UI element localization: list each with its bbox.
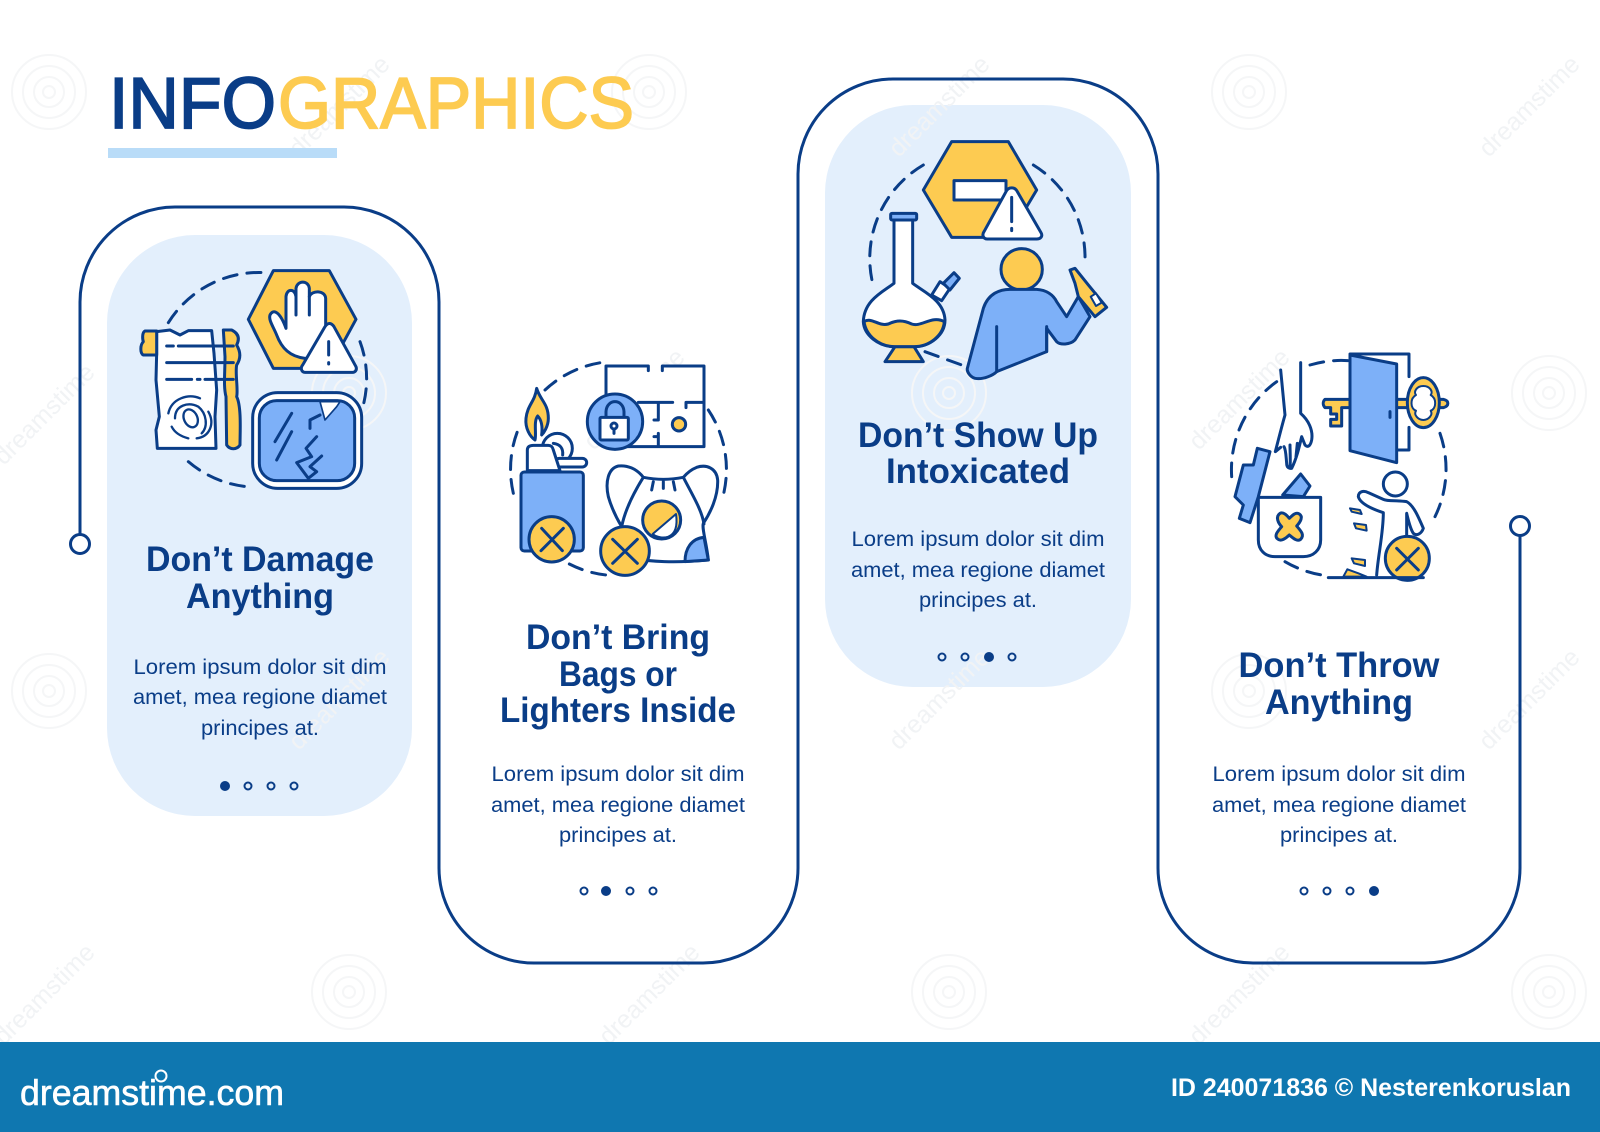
text: card 3	[851, 415, 1105, 612]
text: card 4: Don’t Throw	[1238, 645, 1440, 685]
title	[109, 64, 634, 144]
start node	[70, 534, 90, 554]
text: card 1: amet, mea regione diamet	[133, 685, 387, 709]
pagination dots: card 2	[580, 887, 656, 895]
footer band	[0, 1042, 1600, 1132]
text: card 4: Anything	[1265, 682, 1413, 722]
title underline	[108, 148, 337, 158]
title: GRAPHICS	[278, 64, 634, 144]
diagonal watermark text: dreamstime	[883, 643, 995, 755]
icon: damage (scroll, stop hand, broken mirror)	[141, 271, 367, 488]
text: card 4	[1212, 645, 1466, 847]
footer logo: dreamstime.com	[20, 1072, 284, 1113]
text: card 2: amet, mea regione diamet	[491, 793, 745, 817]
text: card 2: Lorem ipsum dolor sit dim	[492, 762, 744, 786]
diagonal watermark text: dreamstime	[283, 50, 395, 162]
icon: hookah, person with bottle, stop sign	[863, 142, 1107, 379]
text: card 3: amet, mea regione diamet	[851, 558, 1105, 582]
pagination dots: card 1	[221, 782, 298, 790]
text: card 4: Lorem ipsum dolor sit dim	[1212, 762, 1466, 786]
text: card 4: principes at.	[1280, 823, 1398, 847]
diagonal watermark text: dreamstime	[1183, 938, 1295, 1050]
text: card 1: Lorem ipsum dolor sit dim	[134, 655, 386, 679]
text: card 3: Don’t Show Up	[858, 415, 1098, 455]
connecting outline across all four cards	[80, 79, 1520, 963]
diagonal watermark text: dreamstime	[1183, 343, 1295, 455]
text: card 2: Lighters Inside	[500, 690, 736, 730]
text: card 1: Anything	[186, 576, 334, 616]
text: card 3: Intoxicated	[886, 451, 1070, 491]
pagination dots: card 4	[1300, 887, 1378, 895]
diagonal watermark text: dreamstime	[1473, 643, 1585, 755]
footer credit: ID 240071836 © Nesterenkoruslan	[1171, 1074, 1571, 1102]
diagonal watermark text: dreamstime	[1473, 50, 1585, 162]
panel: card 3 background	[825, 105, 1131, 687]
title: INFO	[109, 64, 276, 144]
text: card 3: Lorem ipsum dolor sit dim	[852, 527, 1104, 551]
diagonal watermark text: dreamstime	[883, 50, 995, 162]
pagination dots: card 3	[938, 653, 1016, 661]
text: card 2: principes at.	[559, 823, 677, 847]
icon: lighter, bag and floor plan	[511, 363, 726, 575]
panel: card 1 background	[107, 235, 412, 816]
text: card 3: principes at.	[919, 588, 1037, 612]
diagonal watermark text: dreamstime	[283, 643, 395, 755]
diagonal watermark text: dreamstime	[593, 938, 705, 1050]
diagonal watermark text: dreamstime	[578, 343, 690, 455]
text: card 2: Don’t Bring	[526, 617, 710, 657]
text: card 1	[133, 539, 387, 740]
text: card 2	[491, 617, 745, 847]
end node	[1510, 516, 1530, 536]
text: card 1: principes at.	[201, 716, 319, 740]
icon: throwing, bin, door and key	[1231, 354, 1448, 580]
text: card 4: amet, mea regione diamet	[1212, 793, 1466, 817]
text: card 1: Don’t Damage	[146, 539, 374, 579]
text: card 2: Bags or	[559, 654, 677, 694]
